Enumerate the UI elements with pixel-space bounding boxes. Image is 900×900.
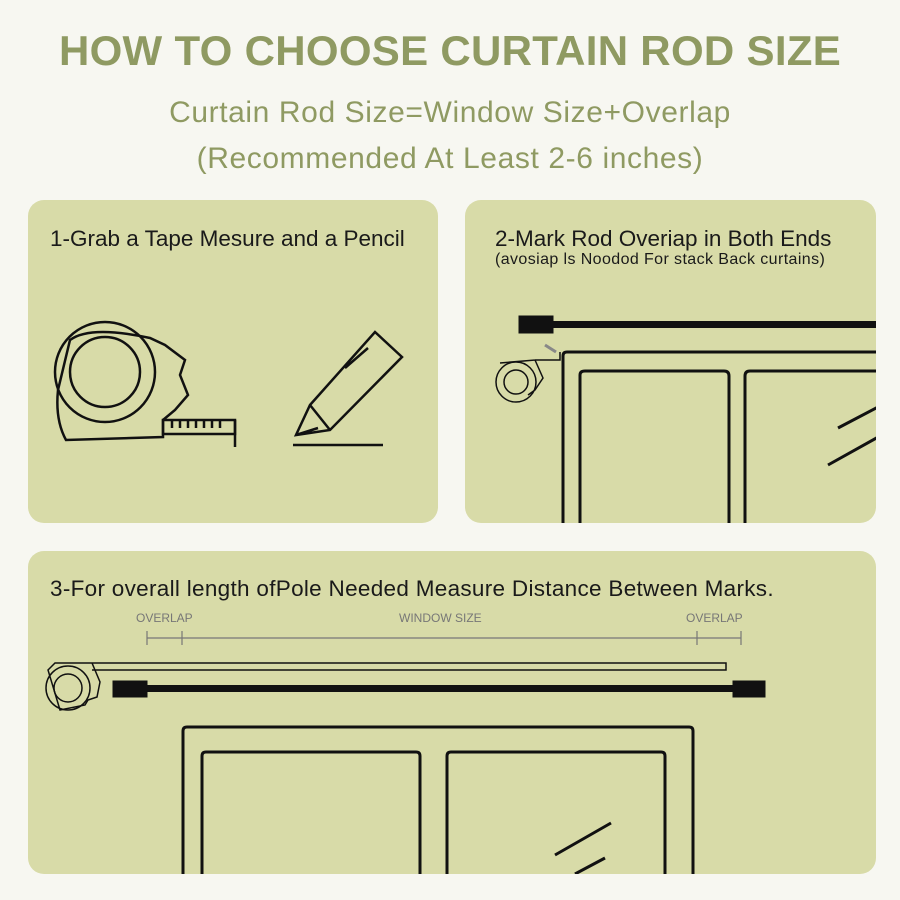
panel: step 1: [28, 200, 438, 523]
dimension labels and line: OVERLAP: [136, 611, 193, 625]
subtitle: (Recommended At Least 2-6 inches): [197, 142, 703, 175]
step 2 note: (avosiap ls Noodod For stack Back curtains): [495, 251, 825, 268]
step 2 heading: 2-Mark Rod Overiap in Both Ends: [495, 226, 831, 251]
subtitle: [169, 96, 731, 175]
dimension labels and line: [45, 611, 766, 874]
illustration: rod and window: [495, 316, 876, 523]
subtitle: Curtain Rod Size=Window Size+Overlap: [169, 96, 731, 129]
icons: tape measure and pencil: [54, 320, 404, 447]
step 1 heading: 1-Grab a Tape Mesure and a Pencil: [50, 226, 405, 251]
dimension labels and line: OVERLAP: [686, 611, 743, 625]
panel: step 3: [28, 551, 876, 874]
dimension labels and line: WINDOW SIZE: [399, 611, 482, 625]
panel: step 2: [465, 200, 876, 523]
step 3 heading: 3-For overall length ofPole Needed Measure Distance Between Marks.: [50, 576, 774, 601]
title: HOW TO CHOOSE CURTAIN ROD SIZE: [59, 27, 841, 74]
